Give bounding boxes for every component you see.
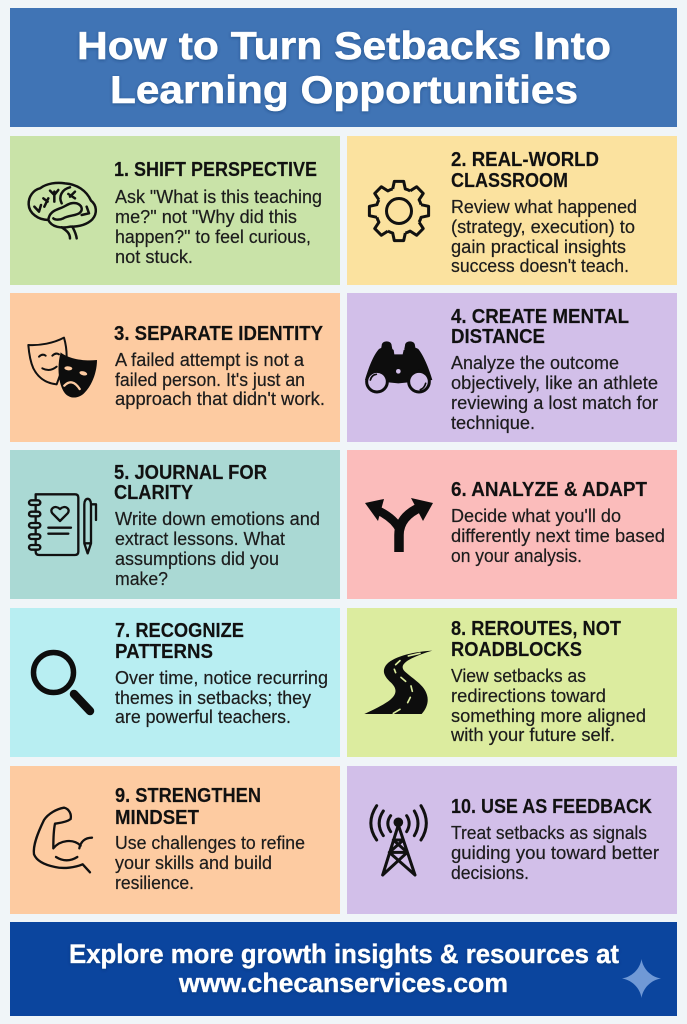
footer text: Explore more growth insights & resources at [69, 939, 619, 969]
footer banner [10, 922, 677, 1016]
body text [450, 665, 646, 745]
body text: not stuck. [115, 246, 193, 267]
icon: winding road [364, 651, 432, 714]
panel: 8 reroutes not roadblocks [347, 608, 677, 757]
heading: 9. STRENGTHEN [115, 784, 261, 807]
heading: 1. SHIFT PERSPECTIVE [114, 158, 317, 181]
body text: failed person. It's just an [115, 369, 305, 390]
title [77, 25, 611, 112]
icon: signal tower [371, 806, 426, 875]
heading: 7. RECOGNIZE [115, 619, 244, 642]
body text: on your analysis. [451, 545, 582, 566]
heading [115, 619, 244, 663]
heading: PATTERNS [115, 640, 213, 663]
heading: ROADBLOCKS [451, 638, 582, 661]
icon: forked arrows [365, 498, 433, 552]
panel: 9 strengthen mindset [10, 766, 340, 914]
icon: brain [29, 183, 96, 238]
body text: differently next time based [451, 525, 665, 546]
icon: theatre masks [28, 338, 97, 398]
panel: 4 create mental distance [347, 293, 677, 442]
heading: CLARITY [114, 481, 193, 504]
body text [451, 352, 658, 433]
body text [115, 508, 320, 589]
panel: 6 analyze and adapt [347, 450, 677, 599]
heading: 3. SEPARATE IDENTITY [114, 322, 323, 345]
body text: approach that didn't work. [115, 388, 325, 409]
body text: assumptions did you [115, 548, 279, 569]
icon: journal and pen [29, 494, 96, 555]
panel: 5 journal for clarity [10, 450, 340, 599]
body text: success doesn't teach. [451, 255, 629, 276]
heading: 8. REROUTES, NOT [451, 617, 621, 640]
heading: 2. REAL-WORLD [451, 148, 599, 171]
title: How to Turn Setbacks Into [77, 25, 611, 68]
heading: MINDSET [115, 806, 199, 829]
body text: your skills and build [115, 852, 272, 873]
icon: flexed arm [34, 808, 92, 872]
icon: binoculars [365, 341, 432, 392]
body text: gain practical insights [451, 236, 626, 257]
icon: sparkle [622, 959, 661, 998]
heading [451, 305, 629, 348]
body text: me?" not "Why did this [115, 206, 297, 227]
body text [115, 349, 325, 409]
body text: objectively, like an athlete [451, 372, 658, 393]
heading [114, 461, 267, 504]
body text: Ask "What is this teaching [115, 186, 322, 207]
heading: DISTANCE [451, 325, 545, 348]
header banner [10, 8, 677, 127]
footer text: www.checanservices.com [178, 968, 508, 998]
body text: extract lessons. What [115, 528, 285, 549]
body text: resilience. [115, 872, 194, 893]
body text: reviewing a lost match for [451, 392, 658, 413]
panel: 1 shift perspective [10, 136, 340, 285]
heading [451, 148, 599, 192]
panel: 3 separate identity [10, 293, 340, 442]
body text [451, 505, 665, 566]
body text: redirections toward [451, 685, 606, 706]
body text: technique. [451, 412, 535, 433]
body text: Review what happened [451, 196, 637, 217]
body text: something more aligned [451, 705, 646, 726]
body text [451, 822, 659, 883]
heading [115, 784, 261, 829]
heading [451, 617, 621, 661]
body text: (strategy, execution) to [451, 216, 635, 237]
body text: themes in setbacks; they [115, 687, 312, 708]
body text: View setbacks as [451, 665, 586, 686]
panel: 2 real-world classroom [347, 136, 677, 285]
body text: A failed attempt is not a [115, 349, 305, 370]
body text [115, 186, 322, 267]
body text [451, 196, 637, 276]
panel: 10 use as feedback [347, 766, 677, 914]
body text: with your future self. [450, 724, 615, 745]
footer text [69, 939, 619, 998]
body text: Decide what you'll do [451, 505, 621, 526]
body text: Treat setbacks as signals [451, 822, 647, 843]
body text: Analyze the outcome [451, 352, 619, 373]
body text: make? [115, 568, 168, 589]
body text [115, 667, 328, 727]
icon: magnifying glass [34, 652, 90, 711]
body text: decisions. [451, 862, 529, 883]
title: Learning Opportunities [110, 69, 578, 112]
panel: 7 recognize patterns [10, 608, 340, 757]
heading: 4. CREATE MENTAL [451, 305, 629, 328]
body text: happen?" to feel curious, [115, 226, 311, 247]
icon: gear [369, 181, 429, 241]
heading: 6. ANALYZE & ADAPT [451, 478, 647, 501]
body text: Write down emotions and [115, 508, 320, 529]
heading: 5. JOURNAL FOR [114, 461, 267, 484]
body text: Over time, notice recurring [115, 667, 328, 688]
body text: are powerful teachers. [115, 706, 291, 727]
body text: guiding you toward better [451, 842, 659, 863]
body text: Use challenges to refine [115, 832, 305, 853]
body text [115, 832, 305, 893]
heading: 10. USE AS FEEDBACK [451, 795, 652, 818]
heading: CLASSROOM [451, 169, 568, 192]
